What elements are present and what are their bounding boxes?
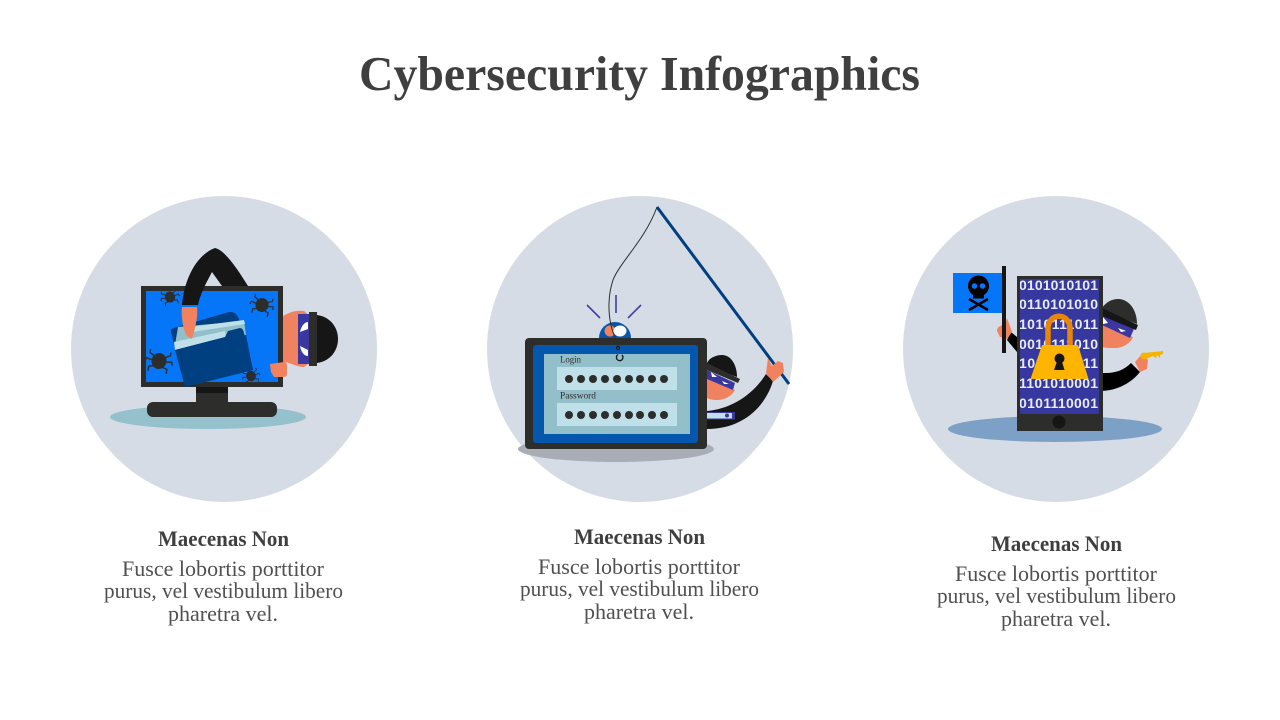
icon: skull and crossbones: [968, 276, 989, 310]
text block: pharetra vel.: [584, 599, 694, 624]
text block: pharetra vel.: [1001, 606, 1111, 631]
text block: [520, 524, 759, 624]
text block: purus, vel vestibulum libero: [937, 583, 1176, 608]
text block: Maecenas Non: [574, 524, 705, 549]
text block: purus, vel vestibulum libero: [104, 578, 343, 603]
text block: pharetra vel.: [168, 601, 278, 626]
title: Cybersecurity Infographics: [359, 46, 920, 101]
illustration: hacker with key and locked phone: 1010111011: [1019, 316, 1098, 332]
background circle: [487, 196, 793, 502]
panel: malware monitor: [71, 196, 377, 626]
illustration: hacker with key and locked phone: 0101110001: [1019, 395, 1098, 411]
illustration: hacker phishing a login screen: [518, 207, 789, 462]
text block: Fusce lobortis porttitor: [538, 554, 740, 579]
text block: [937, 531, 1176, 631]
illustration: hacker phishing a login screen: Login: [560, 354, 581, 364]
text block: Maecenas Non: [158, 526, 289, 551]
illustration: hacker phishing a login screen: Password: [560, 390, 597, 400]
illustration: hacker with key and locked phone: 1101010001: [1019, 375, 1098, 391]
illustration: hacker with key and locked phone: 0010111010: [1019, 336, 1098, 352]
illustration: hacker with key and locked phone: 0110101010: [1019, 296, 1098, 312]
text block: Maecenas Non: [991, 531, 1122, 556]
text block: Fusce lobortis porttitor: [955, 561, 1157, 586]
background circle: [903, 196, 1209, 502]
panel: mobile lock: [903, 196, 1209, 631]
icon: padlock: [1030, 316, 1088, 379]
illustration: hacker stealing folder from monitor: [110, 248, 338, 429]
illustration: hacker with key and locked phone: 0101010101: [1019, 277, 1098, 293]
text block: Fusce lobortis porttitor: [122, 556, 324, 581]
illustration: hacker with key and locked phone: [948, 266, 1163, 442]
text block: [104, 526, 343, 626]
illustration: hacker with key and locked phone: 1010111111: [1019, 355, 1098, 371]
background circle: [71, 196, 377, 502]
text block: purus, vel vestibulum libero: [520, 576, 759, 601]
panel: phishing login: [487, 196, 793, 624]
